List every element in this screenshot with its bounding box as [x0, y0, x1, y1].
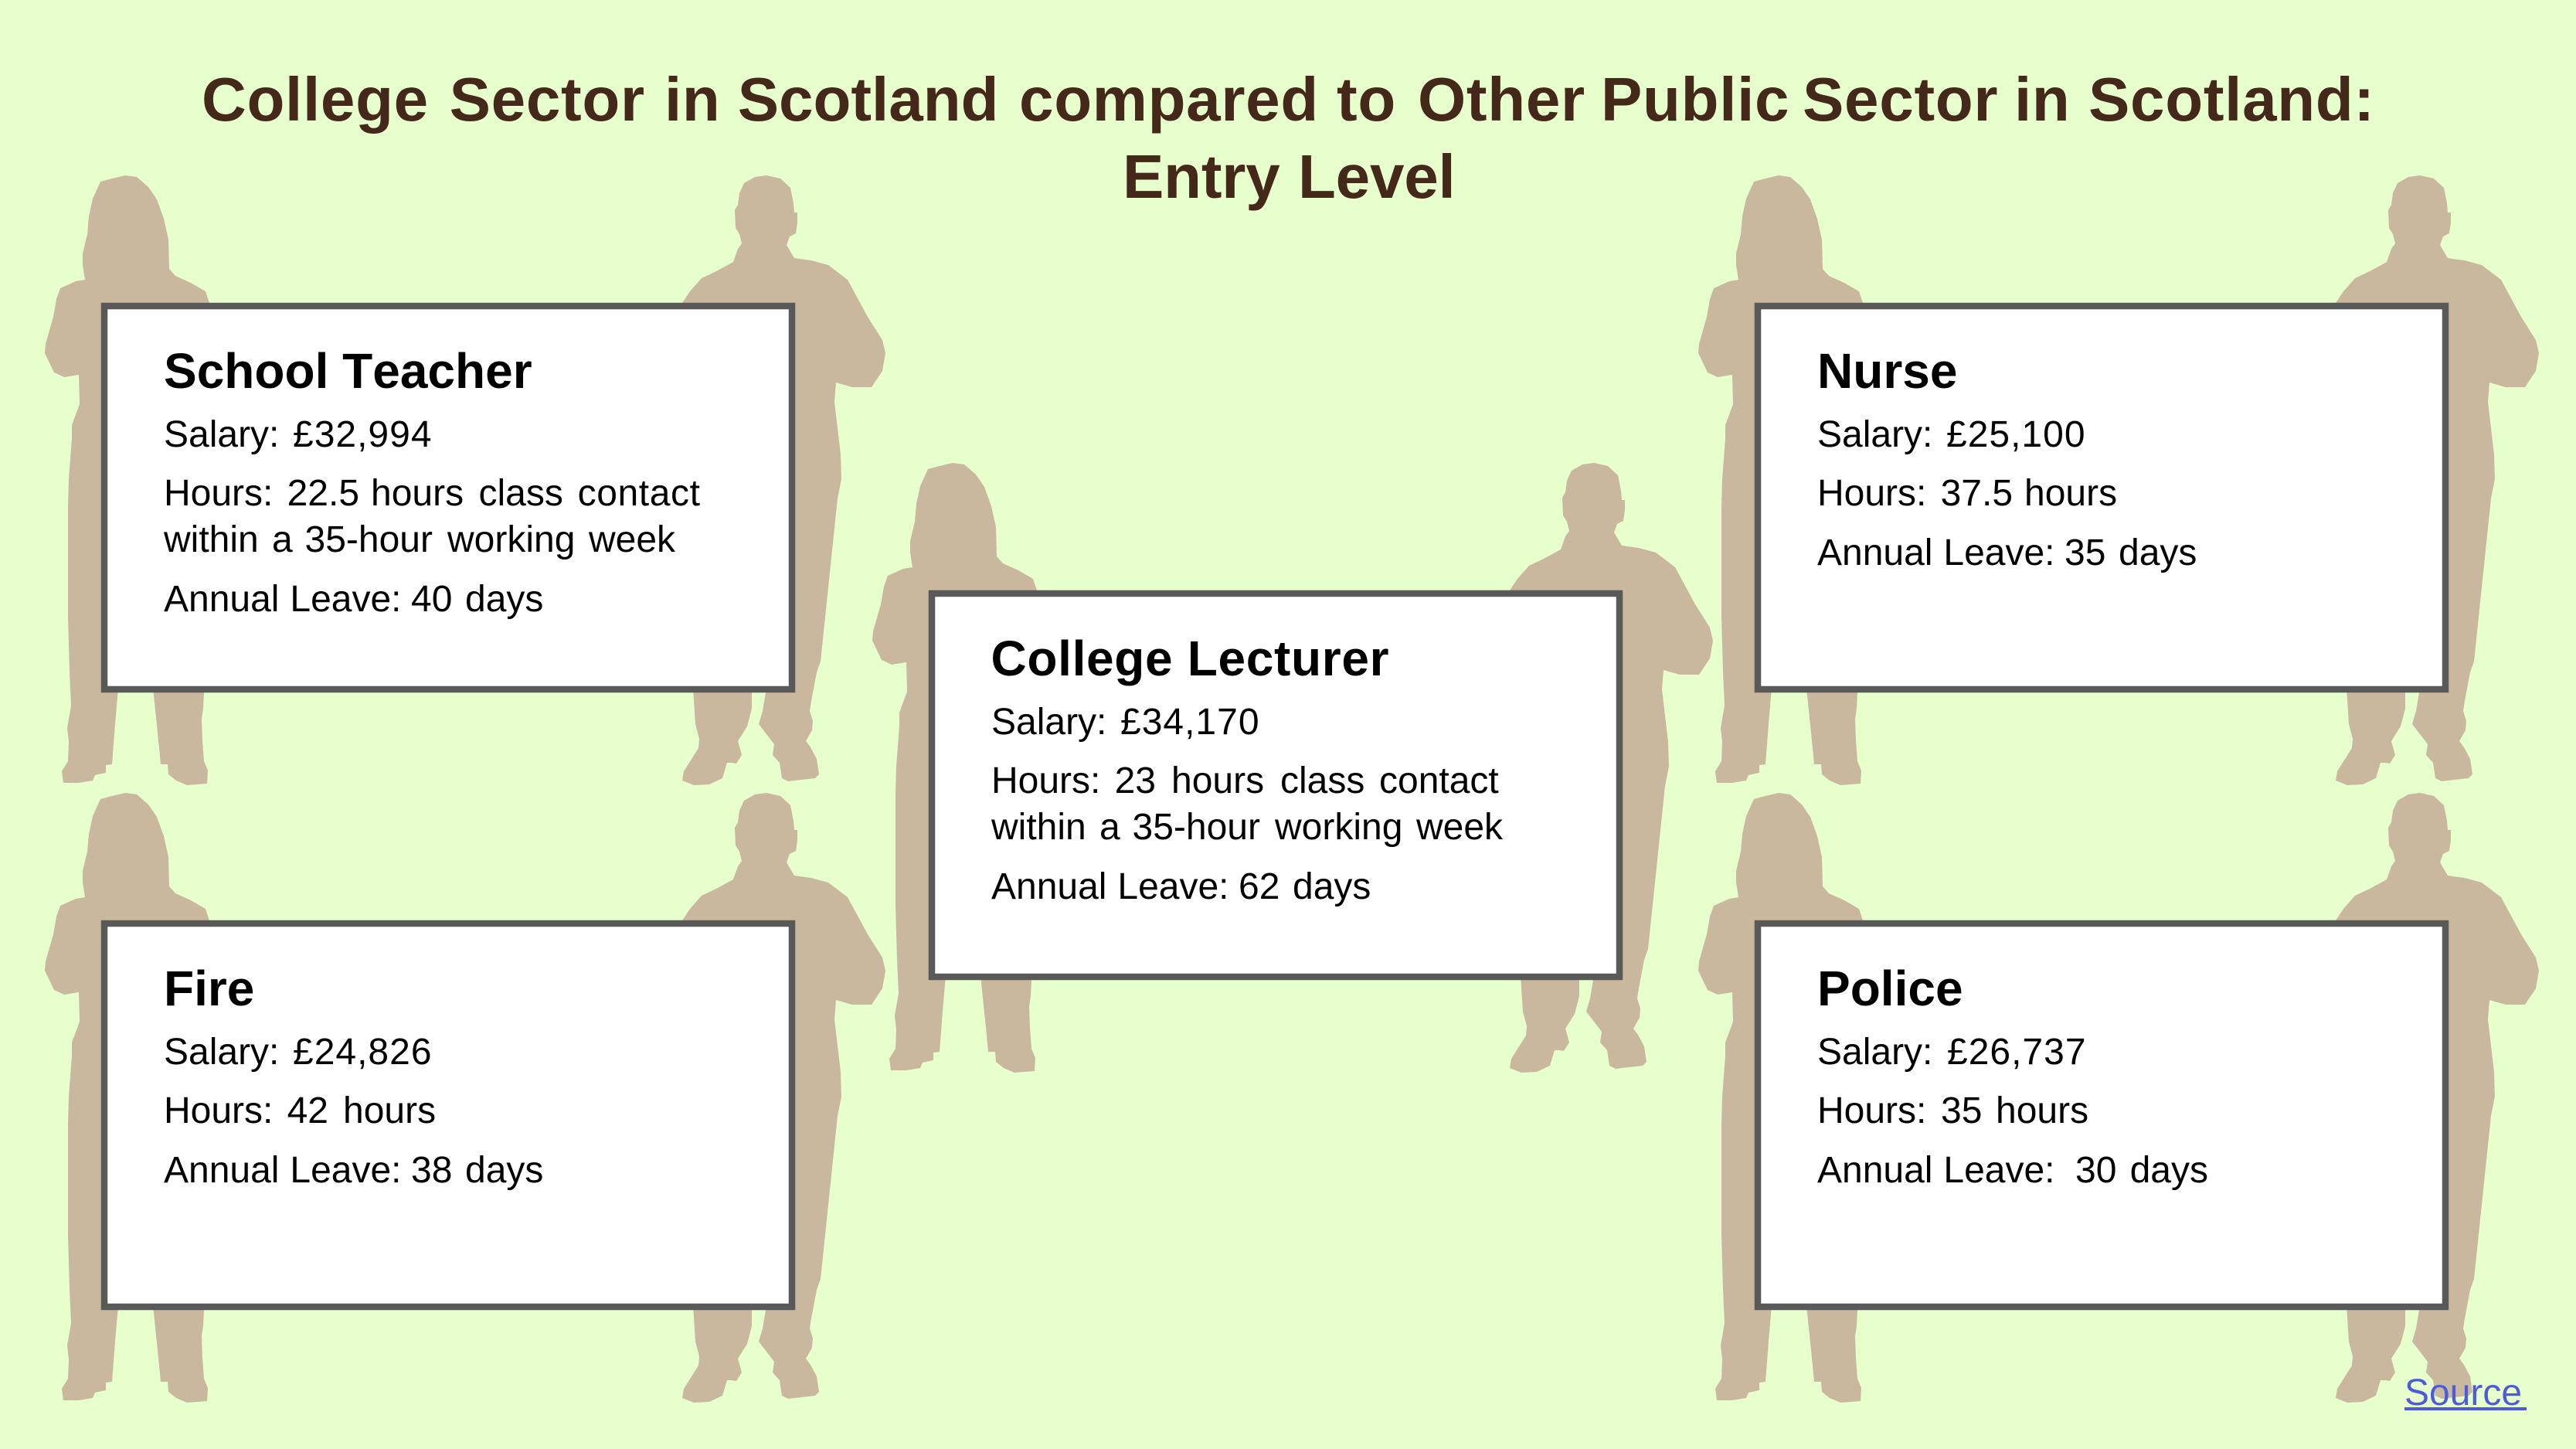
text: School Teacher details: week: [588, 519, 676, 560]
title: to: [1337, 65, 1414, 134]
figure: woman silhouette: [45, 175, 209, 785]
text: College Lecturer details: Annual: [991, 866, 1117, 907]
text: School Teacher details: days: [465, 579, 543, 620]
text: School Teacher details: Hours:: [164, 473, 284, 514]
text: Nurse details: hours: [2024, 473, 2117, 514]
text: Police details: Police: [1817, 961, 1963, 1016]
title: Entry: [1123, 142, 1297, 211]
text: College Lecturer details: 35-hour: [1133, 807, 1270, 848]
text: Police details: hours: [1996, 1090, 2088, 1131]
text: School Teacher details: Salary:: [164, 414, 290, 455]
panel: College Lecturer: [872, 463, 1713, 1073]
text: School Teacher details: hours: [371, 473, 474, 514]
text: Police details: 30: [2075, 1150, 2127, 1191]
text: School Teacher details: class: [479, 473, 573, 514]
text: Nurse details: Annual: [1817, 532, 1943, 573]
figure: man silhouette: [2336, 793, 2539, 1403]
text: Police details: Annual: [1817, 1150, 1943, 1191]
text: School Teacher details: 35-hour: [304, 519, 443, 560]
text: Nurse details: Leave:: [1943, 532, 2065, 573]
figure: man silhouette: [2336, 175, 2539, 785]
text: College Lecturer details: £34,170: [1120, 702, 1260, 743]
text: Nurse details: 37.5: [1941, 473, 2023, 514]
text: College Lecturer details: class: [1280, 760, 1375, 801]
text: College Lecturer details: Hours:: [991, 760, 1111, 801]
text: College Lecturer details: Salary:: [991, 702, 1117, 743]
text: Fire details: Annual: [164, 1150, 290, 1191]
text: School Teacher details: contact: [578, 473, 701, 514]
text: Police details: £26,737: [1947, 1032, 2087, 1073]
text: Police details: Salary:: [1817, 1032, 1943, 1073]
title: College: [202, 65, 447, 134]
text: Police details: Leave:: [1943, 1150, 2075, 1191]
text: Fire details: 38: [411, 1150, 463, 1191]
text: Police details: Hours:: [1817, 1090, 1937, 1131]
figure: man silhouette: [682, 793, 885, 1403]
text: College Lecturer details: 62: [1239, 866, 1290, 907]
text: College Lecturer details: [991, 631, 1504, 907]
card: Police: [1758, 923, 2445, 1307]
text: Fire details: [164, 961, 543, 1191]
text: Police details: 35: [1941, 1090, 1993, 1131]
text: Nurse details: 35: [2065, 532, 2116, 573]
text: School Teacher details: working: [447, 519, 586, 560]
text: School Teacher details: School Teacher: [164, 343, 532, 399]
card: Fire: [104, 923, 792, 1307]
text: School Teacher details: 40: [411, 579, 463, 620]
figure: woman silhouette: [45, 793, 209, 1403]
title: Sector: [1803, 65, 2016, 134]
text: Nurse details: [1817, 343, 2197, 573]
panel: School Teacher: [45, 175, 885, 785]
text: Fire details: days: [465, 1150, 543, 1191]
card: School Teacher: [104, 306, 792, 689]
text: College Lecturer details: a: [1099, 807, 1130, 848]
title: Scotland: [738, 65, 1016, 134]
text: Fire details: Fire: [164, 961, 254, 1016]
text: Nurse details: days: [2119, 532, 2197, 573]
text: College Lecturer details: 23: [1115, 760, 1166, 801]
text: Police details: days: [2130, 1150, 2208, 1191]
text: College Lecturer details: hours: [1171, 760, 1274, 801]
title: compared: [1019, 65, 1337, 134]
panel: Police: [1698, 793, 2539, 1403]
panel: Nurse: [1698, 175, 2539, 785]
text: College Lecturer details: College Lecturer: [991, 631, 1389, 686]
text: Fire details: Hours:: [164, 1090, 284, 1131]
title: Other: [1418, 65, 1603, 134]
figure: woman silhouette: [872, 463, 1037, 1073]
figure: woman silhouette: [1698, 793, 1863, 1403]
text: College Lecturer details: week: [1415, 807, 1504, 848]
panel: Fire: [45, 793, 885, 1403]
card: College Lecturer: [932, 594, 1619, 977]
text: Fire details: £24,826: [293, 1032, 433, 1073]
text: School Teacher details: Annual: [164, 579, 290, 620]
text: Fire details: 42: [287, 1090, 338, 1131]
text: School Teacher details: [163, 343, 701, 620]
title: in: [2014, 65, 2088, 134]
title: Public: [1601, 65, 1807, 134]
text: College Lecturer details: working: [1274, 807, 1413, 848]
text: Nurse details: Hours:: [1817, 473, 1937, 514]
text: College Lecturer details: Leave:: [1117, 866, 1239, 907]
text: College Lecturer details: contact: [1379, 760, 1499, 801]
text: Police details: [1817, 961, 2208, 1191]
figure: woman silhouette: [1698, 175, 1863, 785]
text: School Teacher details: £32,994: [293, 414, 433, 455]
text: School Teacher details: 22.5: [287, 473, 369, 514]
title: Scotland:: [2088, 65, 2375, 134]
text: College Lecturer details: within: [991, 807, 1096, 848]
text: School Teacher details: a: [272, 519, 303, 560]
title: Sector: [450, 65, 663, 134]
text: College Lecturer details: days: [1293, 866, 1371, 907]
text: Nurse details: Salary:: [1817, 414, 1943, 455]
card: Nurse: [1758, 306, 2445, 689]
text: Nurse details: Nurse: [1817, 343, 1957, 399]
source link: Source: [2404, 1372, 2522, 1413]
figure: man silhouette: [1510, 463, 1713, 1073]
text: School Teacher details: Leave:: [290, 579, 412, 620]
text: Fire details: Leave:: [290, 1150, 412, 1191]
text: School Teacher details: within: [163, 519, 269, 560]
text: Fire details: Salary:: [164, 1032, 290, 1073]
text: Nurse details: £25,100: [1946, 414, 2086, 455]
figure: man silhouette: [682, 175, 885, 785]
title: [202, 65, 2375, 211]
text: Fire details: hours: [343, 1090, 436, 1131]
title: Level: [1298, 142, 1456, 211]
title: in: [664, 65, 738, 134]
